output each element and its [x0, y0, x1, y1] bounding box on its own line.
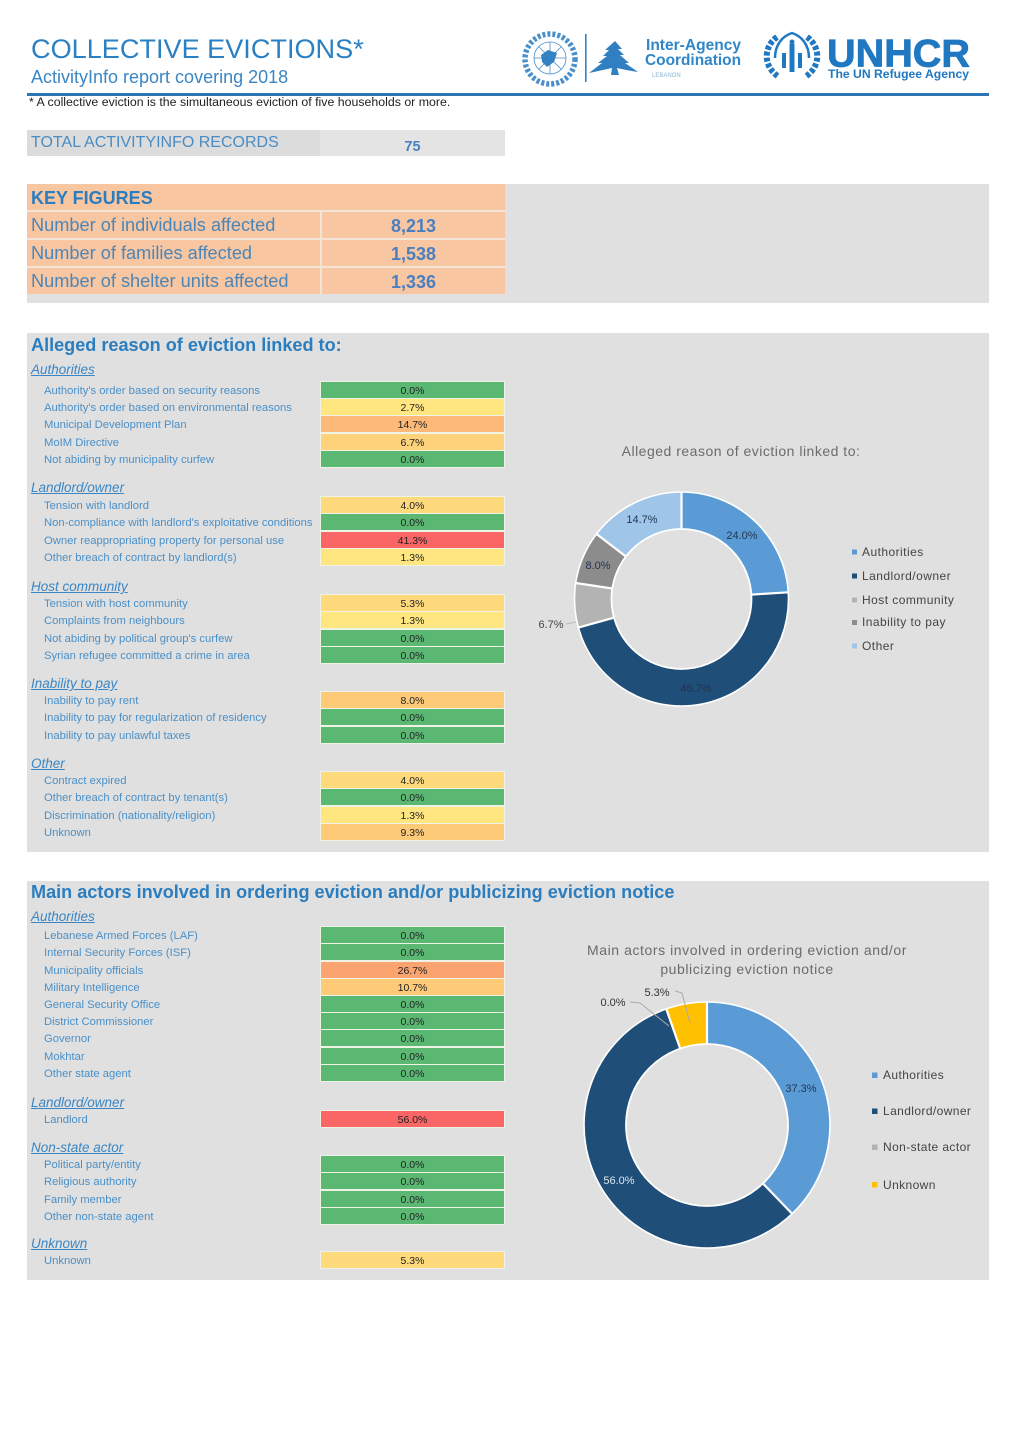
group: authorities: 0.0%: [401, 1051, 424, 1063]
group: authorities: 2.7%: [401, 402, 424, 414]
group: unknown: [31, 1236, 505, 1269]
chart title: Alleged reason of eviction linked to:: [622, 443, 860, 459]
group: landlord/owner: Other breach of contract by landlord(s): [44, 552, 237, 564]
group: authorities: 26.7%: [398, 964, 427, 976]
group: non-state actor: 0.0%: [401, 1176, 424, 1188]
panel: alleged reason of eviction: [27, 333, 989, 852]
figure: individuals: [27, 210, 505, 238]
group: host community: Tension with host community: [44, 598, 188, 610]
group: landlord/owner: 4.0%: [401, 500, 424, 512]
legend: Landlord/owner: [883, 1104, 971, 1118]
group: non-state actor: [31, 1140, 505, 1225]
group: inability to pay: 0.0%: [401, 712, 424, 724]
legend: Authorities: [883, 1068, 944, 1082]
figure: individuals: Number of individuals affected: [31, 215, 275, 235]
group: non-state actor: 0.0%: [401, 1159, 424, 1171]
logo: UN emblem: [525, 34, 575, 84]
group heading: Authorities: [31, 909, 95, 924]
group: authorities: 10.7%: [398, 982, 427, 994]
legend: Landlord/owner: [862, 569, 951, 583]
group: non-state actor: Political party/entity: [44, 1159, 141, 1171]
figure: shelter units: Number of shelter units affected: [31, 271, 288, 291]
donut chart: alleged reason: [538, 443, 954, 707]
data labels: 56.0%: [603, 1175, 635, 1187]
group: other: 4.0%: [401, 775, 424, 787]
group: authorities: Authority's order based on environmental reasons: [44, 402, 292, 414]
logo text: Inter-Agency Coordination: LEBANON: [652, 73, 681, 79]
legend: Inability to pay: [862, 615, 946, 629]
panel: total records: [27, 130, 505, 156]
group: inability to pay: Inability to pay for regularization of residency: [44, 712, 267, 724]
group: inability to pay: [31, 676, 505, 744]
legend: Host community: [862, 593, 954, 607]
group heading: Host community: [31, 579, 128, 594]
group heading: Landlord/owner: [31, 480, 124, 495]
group: authorities: Municipal Development Plan: [44, 419, 187, 431]
group: landlord/owner: 0.0%: [401, 517, 424, 529]
logo text: Inter-Agency Coordination: [645, 37, 741, 79]
group: authorities: 0.0%: [401, 930, 424, 942]
header rule: [27, 93, 989, 96]
group: authorities: Mokhtar: [44, 1051, 85, 1063]
group: authorities: Municipality officials: [44, 964, 143, 976]
group: other: Contract expired: [44, 775, 127, 787]
group: inability to pay: Inability to pay rent: [44, 695, 138, 707]
group: authorities: 0.0%: [401, 1033, 424, 1045]
group: host community: [31, 579, 505, 664]
data labels: 37.3%: [785, 1083, 817, 1095]
group: landlord/owner: Owner reappropriating property for personal use: [44, 534, 284, 546]
footnote: * A collective eviction is the simultaneous eviction of five households or more.: [29, 95, 450, 109]
logo text: UNHCR: UNHCR: [827, 32, 970, 76]
donut chart: main actors: publicizing eviction notice: [660, 961, 834, 977]
group: non-state actor: Family member: [44, 1194, 122, 1206]
data labels: 8.0%: [585, 560, 611, 572]
panel: main actors: [27, 881, 989, 1280]
logo text: The UN Refugee Agency: The UN Refugee Agency: [828, 69, 970, 81]
group: landlord/owner: 41.3%: [398, 534, 427, 546]
group: authorities: 0.0%: [401, 1068, 424, 1080]
section heading: Alleged reason of eviction linked to:: [31, 335, 342, 355]
donut rings: [574, 492, 789, 706]
group: host community: 1.3%: [401, 615, 424, 627]
group: authorities: 0.0%: [401, 385, 424, 397]
group heading: Other: [31, 756, 65, 771]
data labels: 24.0%: [726, 530, 758, 542]
logo: UNHCR emblem: [767, 33, 817, 77]
group: non-state actor: Other non-state agent: [44, 1211, 153, 1223]
figure: families: Number of families affected: [31, 243, 252, 263]
group: host community: Not abiding by political group's curfew: [44, 632, 232, 644]
group: authorities: Internal Security Forces (ISF): [44, 947, 191, 959]
chart title: Main actors involved in ordering eviction and/or: [587, 942, 907, 958]
data labels: 0.0%: [600, 997, 626, 1009]
group: authorities: Military Intelligence: [44, 982, 140, 994]
legend: Authorities: [862, 545, 924, 559]
group: unknown: Unknown: [44, 1255, 91, 1267]
key figures heading: KEY FIGURES: [31, 188, 153, 208]
group: authorities: General Security Office: [44, 999, 160, 1011]
group: authorities: [30, 362, 505, 468]
group: authorities: 14.7%: [398, 419, 427, 431]
group: non-state actor: 0.0%: [401, 1194, 424, 1206]
group: authorities: Other state agent: [44, 1068, 131, 1080]
section heading: Main actors involved in ordering eviction and/or publicizing eviction notice: [31, 882, 674, 902]
group: authorities: District Commissioner: [44, 1016, 153, 1028]
figure: families: [27, 238, 505, 266]
data labels: 46.7%: [680, 683, 712, 695]
title: COLLECTIVE EVICTIONS*: [31, 33, 364, 64]
group: inability to pay: Inability to pay unlawful taxes: [44, 730, 190, 742]
legend: Other: [862, 639, 894, 653]
group: authorities: Governor: [44, 1033, 91, 1045]
data labels: 14.7%: [626, 514, 658, 526]
legend: Unknown: [883, 1178, 936, 1192]
logo text: Inter-Agency Coordination: Inter-Agency: [646, 37, 741, 54]
group: non-state actor: Religious authority: [44, 1176, 137, 1188]
group: landlord/owner: Non-compliance with landlord's exploitative conditions: [44, 517, 313, 529]
figure: families: 1,538: [391, 244, 436, 264]
group heading: Authorities: [31, 362, 95, 377]
group: other: Other breach of contract by tenant(s): [44, 792, 228, 804]
figure: individuals: 8,213: [391, 216, 436, 236]
donut chart: main actors: [583, 942, 971, 1249]
group: landlord/owner: 1.3%: [401, 552, 424, 564]
group: inability to pay: 8.0%: [401, 695, 424, 707]
figure: shelter units: [27, 266, 505, 294]
group: authorities: 0.0%: [401, 999, 424, 1011]
group: host community: 5.3%: [401, 598, 424, 610]
panel: key figures: [27, 184, 989, 303]
group: landlord/owner: Tension with landlord: [44, 500, 149, 512]
group: authorities: 0.0%: [401, 947, 424, 959]
data labels: [600, 987, 817, 1187]
group: authorities: 6.7%: [401, 437, 424, 449]
figure: shelter units: 1,336: [391, 272, 436, 292]
legend: Non-state actor: [883, 1140, 971, 1154]
subtitle: ActivityInfo report covering 2018: [31, 67, 288, 87]
group: authorities: Not abiding by municipality curfew: [44, 454, 214, 466]
group: other: 1.3%: [401, 810, 424, 822]
group: authorities: MoIM Directive: [44, 437, 119, 449]
total records label: [27, 130, 320, 156]
total records value: 75: [404, 139, 421, 155]
group: host community: Complaints from neighbours: [44, 615, 185, 627]
group: authorities: Lebanese Armed Forces (LAF): [44, 930, 198, 942]
logo: cedar tree: [589, 41, 638, 75]
group: other: Discrimination (nationality/religion): [44, 810, 215, 822]
divider line: [585, 34, 587, 82]
total records label: TOTAL ACTIVITYINFO RECORDS: [31, 134, 279, 151]
group: other: 0.0%: [401, 792, 424, 804]
group: landlord/owner: 56.0%: [398, 1114, 427, 1126]
logos: [522, 31, 970, 87]
group: unknown: 5.3%: [401, 1255, 424, 1267]
data labels: 6.7%: [538, 619, 564, 631]
group: authorities: 0.0%: [401, 1016, 424, 1028]
data labels: 5.3%: [644, 987, 670, 999]
group: authorities: Authority's order based on security reasons: [44, 385, 260, 397]
group: other: 9.3%: [401, 827, 424, 839]
legend: [872, 1068, 971, 1192]
legend: [852, 545, 954, 653]
logo text: Inter-Agency Coordination: Coordination: [645, 52, 741, 69]
group: other: [31, 756, 505, 841]
group: authorities: [30, 909, 505, 1082]
group: host community: 0.0%: [401, 632, 424, 644]
data labels: [538, 514, 758, 695]
group: inability to pay: 0.0%: [401, 730, 424, 742]
group heading: Inability to pay: [31, 676, 117, 691]
group: other: Unknown: [44, 827, 91, 839]
group: host community: 0.0%: [401, 650, 424, 662]
group: authorities: 0.0%: [401, 454, 424, 466]
group heading: Non-state actor: [31, 1140, 123, 1155]
group: landlord/owner: Landlord: [44, 1114, 88, 1126]
group heading: Unknown: [31, 1236, 87, 1251]
group: landlord/owner: [31, 480, 505, 566]
donut rings: [584, 1002, 830, 1248]
key figures table: [27, 184, 505, 294]
group: host community: Syrian refugee committed a crime in area: [44, 650, 250, 662]
group: non-state actor: 0.0%: [401, 1211, 424, 1223]
group: landlord/owner: [31, 1095, 505, 1128]
group heading: Landlord/owner: [31, 1095, 124, 1110]
